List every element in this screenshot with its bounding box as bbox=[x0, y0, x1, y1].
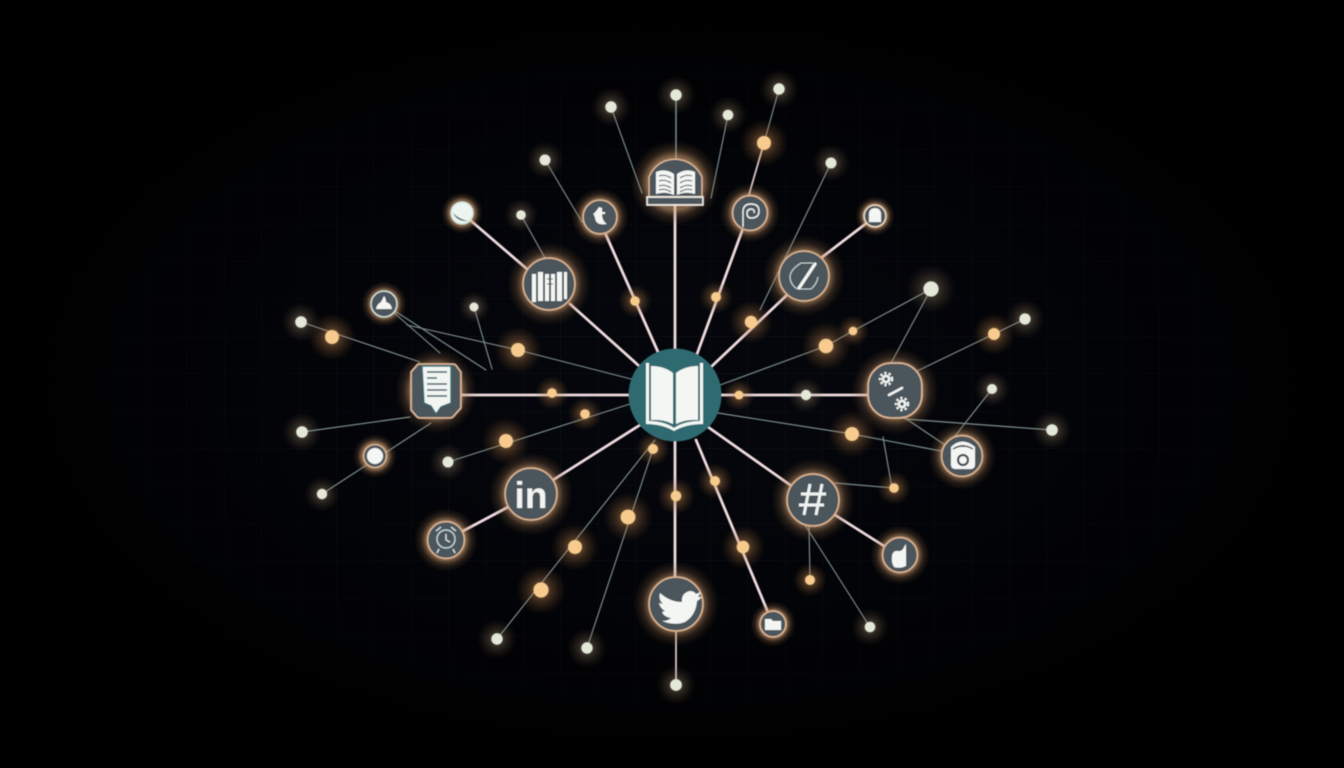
icon: small bubble top right bbox=[855, 196, 895, 236]
icon: LinkedIn circle: in bbox=[515, 475, 547, 516]
icon: folder circle bbox=[750, 601, 796, 647]
pale outer dots bbox=[281, 69, 1072, 705]
thick connector lines bbox=[462, 89, 884, 680]
icon: small sphere top left bbox=[441, 192, 483, 234]
orange relay dots bbox=[308, 119, 1015, 615]
thin connector lines bbox=[301, 95, 1052, 648]
central hub: open book bbox=[628, 348, 722, 442]
icon: slash circle bbox=[763, 235, 845, 317]
icon: LinkedIn circle bbox=[489, 452, 573, 536]
icon: letter p circle bbox=[720, 183, 780, 243]
icon: Twitter bird circle bbox=[633, 561, 719, 647]
icon: bookshelf circle bbox=[507, 242, 591, 326]
icon: hash circle bbox=[771, 458, 855, 542]
icon: camera circle bbox=[928, 422, 996, 490]
icon: t circle bbox=[571, 188, 629, 246]
network diagram bbox=[109, 65, 1234, 703]
icon: book node bbox=[630, 140, 720, 226]
icon: blob circle bbox=[353, 434, 397, 478]
icon: apple circle bbox=[870, 525, 930, 585]
icon: thumb badge bbox=[361, 281, 407, 327]
all network elements bbox=[281, 69, 1072, 705]
icon: alarm clock circle bbox=[414, 508, 478, 572]
icon: document node bbox=[395, 348, 477, 434]
icon: gears node bbox=[851, 347, 939, 435]
